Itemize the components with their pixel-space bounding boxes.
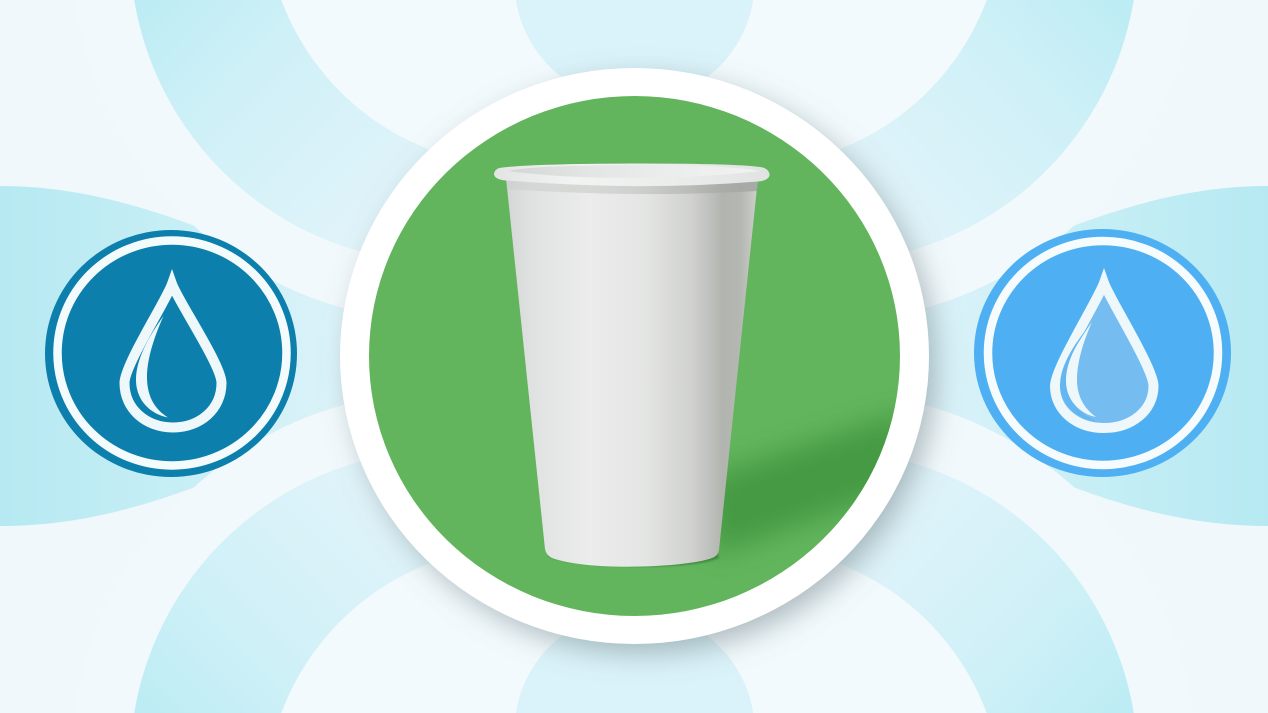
white ring: [340, 68, 929, 644]
icon: light blue water drop badge: [974, 229, 1231, 477]
cup rim: [494, 164, 770, 186]
paper cup: [494, 164, 770, 567]
central circle drop shadow: [351, 80, 935, 652]
cup contact shadow: [548, 551, 719, 566]
green circle: [369, 96, 900, 616]
icon: dark blue water drop badge: [45, 230, 297, 477]
cup body: [506, 178, 758, 567]
cup opening: [508, 165, 760, 178]
cup shadow on green: [718, 404, 896, 556]
shadow beneath rim: [506, 180, 758, 194]
